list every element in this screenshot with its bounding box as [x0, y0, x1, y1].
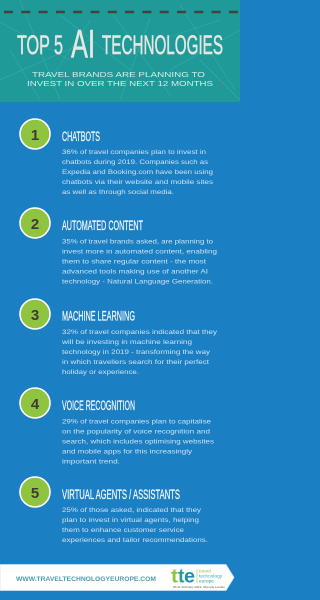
item 5: virtual agents — [20, 477, 208, 544]
icon: number 2 badge — [20, 208, 50, 238]
title: AI — [71, 22, 95, 66]
logo: tte: technology — [199, 574, 223, 580]
title — [17, 22, 223, 66]
body: automated content: 35% of travel brands asked, are planning to — [62, 238, 214, 246]
body: machine learning: will be investing in machine learning — [61, 339, 193, 346]
logo: tte: t — [171, 566, 179, 588]
body: chatbots: chatbots during 2019. Companies such as — [62, 159, 208, 166]
subtitle: INVEST IN OVER THE NEXT 12 MONTHS — [27, 81, 213, 88]
body: chatbots: 36% of travel companies plan to invest in — [62, 149, 207, 156]
item 4: voice recognition — [20, 388, 214, 466]
body: chatbots: as well as through social media. — [62, 189, 174, 196]
icon: number 4 badge — [20, 388, 50, 418]
body: automated content: them to share regular content - the most — [62, 258, 206, 266]
body: machine learning: in which travellers search for their perfect — [62, 359, 209, 366]
heading: automated content: AUTOMATED CONTENT — [62, 218, 143, 233]
body: chatbots: chatbots via their website and mobile sites — [62, 179, 213, 186]
body: machine learning: technology in 2019 - transforming the way — [62, 349, 211, 356]
heading: voice recognition: VOICE RECOGNITION — [62, 398, 135, 413]
body: virtual agents: 25% of those asked, indicated that they — [62, 507, 202, 514]
body: automated content: technology - Natural Language Generation. — [62, 278, 213, 286]
header panel — [0, 0, 240, 102]
dashed line — [4, 11, 238, 13]
icon: number 3 badge: 3 — [31, 307, 39, 324]
icon: number 3 badge — [20, 299, 50, 329]
body: voice recognition: and mobile apps for this increasingly — [62, 448, 193, 456]
body: virtual agents: them to enhance customer service — [62, 527, 185, 534]
icon: number 5 badge — [20, 477, 50, 507]
body: machine learning: 32% of travel companies indicated that they — [62, 329, 218, 336]
icon: number 2 badge: 2 — [31, 216, 39, 233]
item 1: chatbots — [20, 119, 214, 196]
icon: number 4 badge: 4 — [31, 396, 40, 413]
logo: tte: 20-21 February 2019, Olympia London — [173, 585, 225, 589]
body: virtual agents — [62, 507, 208, 544]
logo: tte — [171, 566, 225, 589]
body: machine learning: holiday or experience. — [62, 369, 139, 376]
footer ribbon — [0, 564, 234, 590]
icon: number 1 badge: 1 — [31, 127, 39, 144]
subtitle: TRAVEL BRANDS ARE PLANNING TO — [32, 72, 206, 79]
body: machine learning — [61, 329, 218, 376]
logo: tte: travel — [199, 568, 211, 574]
body: virtual agents: experiences and tailor recommendations. — [62, 537, 208, 544]
item 3: machine learning — [20, 299, 218, 376]
logo: tte: t — [178, 566, 185, 588]
body: voice recognition: 29% of travel companies plan to capitalise — [62, 418, 212, 426]
body: virtual agents: plan to invest in virtual agents, helping — [62, 517, 200, 524]
website url: WWW.TRAVELTECHNOLOGYEUROPE.COM — [16, 576, 156, 583]
body: voice recognition: search, which includes optimising websites — [62, 438, 214, 446]
body: voice recognition: on the popularity of voice recognition and — [62, 428, 211, 436]
body: voice recognition: important trend. — [62, 458, 120, 466]
body: automated content — [62, 238, 218, 286]
logo: tte: e — [184, 566, 195, 588]
logo: tte: europe — [199, 578, 214, 584]
subtitle — [27, 72, 213, 88]
body: voice recognition — [62, 418, 214, 466]
title: TOP 5 — [17, 30, 63, 60]
body: chatbots: Expedia and Booking.com have been using — [62, 169, 214, 176]
icon: number 5 badge: 5 — [31, 485, 39, 502]
heading: machine learning: MACHINE LEARNING — [62, 308, 135, 324]
body: chatbots — [62, 149, 214, 196]
item 2: automated content — [20, 208, 218, 286]
body: automated content: invest more in automated content, enabling — [62, 248, 218, 256]
heading: chatbots: CHATBOTS — [62, 129, 100, 144]
body: automated content: advanced tools making use of another AI — [62, 268, 208, 276]
icon: number 1 badge — [20, 119, 50, 149]
